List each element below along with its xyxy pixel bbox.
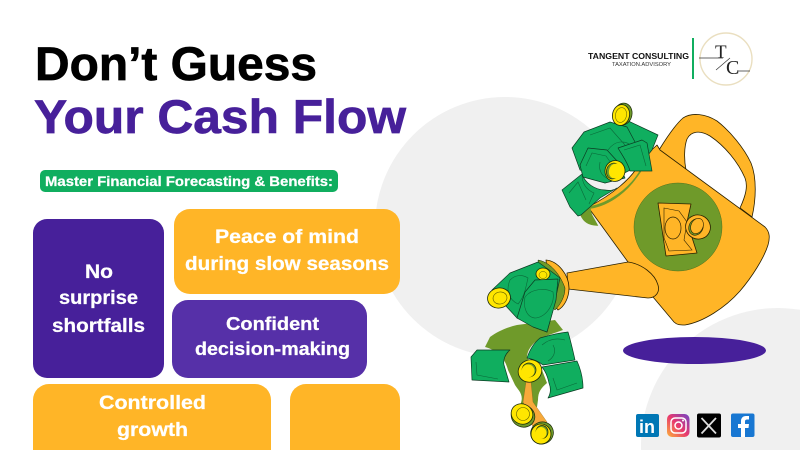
card: no surprise shortfalls: No	[85, 262, 113, 283]
logo: TANGENT CONSULTING	[588, 51, 689, 61]
can handle	[659, 114, 755, 217]
card: confident decision-making: Confident	[226, 314, 319, 334]
coin lower	[507, 400, 539, 431]
olive splash	[485, 320, 563, 407]
icon: linkedin: in	[639, 417, 655, 437]
card: confident decision-making	[172, 300, 367, 378]
shadow ellipse	[623, 337, 766, 364]
can body	[588, 145, 769, 325]
card: no surprise shortfalls	[33, 219, 164, 378]
card: controlled growth: growth	[117, 420, 188, 441]
card: no surprise shortfalls: shortfalls	[52, 316, 145, 337]
icon: facebook	[731, 414, 754, 437]
card: no surprise shortfalls: surprise	[59, 288, 138, 309]
body emblem	[634, 183, 722, 271]
coin top	[611, 101, 634, 127]
logo: TAXATION.ADVISORY	[612, 62, 671, 68]
card: peace of mind: during slow seasons	[185, 254, 389, 275]
icon: instagram	[667, 414, 690, 437]
subtitle pill	[40, 170, 338, 192]
coin middle	[603, 158, 627, 184]
icon: watering can with money	[471, 101, 769, 448]
title: Don’t Guess	[35, 37, 317, 90]
subtitle pill: Master Financial Forecasting & Benefits:	[45, 173, 333, 189]
logo	[588, 33, 752, 85]
social icons	[636, 414, 754, 438]
logo: C	[726, 57, 739, 79]
money lower left	[471, 350, 510, 382]
card: peace of mind	[174, 209, 400, 294]
background circle bottom right	[641, 308, 800, 450]
title: Your Cash Flow	[34, 90, 406, 143]
can spout	[567, 262, 659, 298]
money lower right	[527, 332, 583, 398]
coin bottom	[527, 418, 557, 448]
spout ring	[546, 260, 569, 310]
card: controlled growth	[33, 384, 271, 450]
card: controlled growth: Controlled	[99, 393, 206, 414]
card: peace of mind: Peace of mind	[215, 227, 359, 248]
money in can	[562, 118, 658, 216]
logo: T	[715, 42, 727, 63]
money from spout	[492, 260, 565, 332]
card: confident decision-making: decision-making	[195, 339, 350, 359]
can mouth olive lip	[581, 168, 642, 225]
orange stem	[523, 382, 547, 427]
background circle large	[375, 97, 635, 357]
coin spout	[486, 286, 512, 310]
title	[34, 37, 406, 143]
coin center	[514, 356, 546, 386]
card: empty orange	[290, 384, 400, 450]
icon: X	[697, 414, 721, 438]
